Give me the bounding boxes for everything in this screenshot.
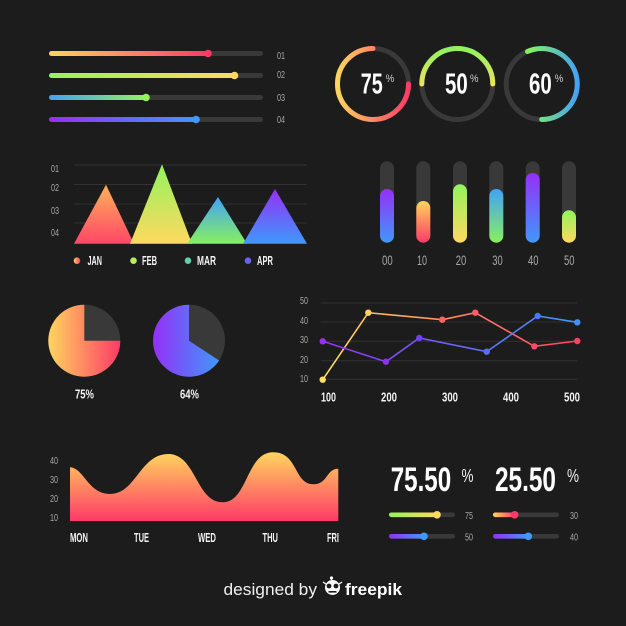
area chart y axis labels: 10: [50, 513, 58, 524]
bar 20: 20: [456, 252, 466, 268]
bar 30: [489, 161, 503, 268]
bar 10: [416, 161, 430, 268]
vertical bar chart: [380, 161, 576, 268]
pie chart 64 percent: [153, 305, 225, 402]
ring gauge 50 percent: 50: [445, 68, 468, 100]
slider 01: [49, 50, 285, 62]
triangle chart legend: JAN: [88, 254, 102, 268]
triangle chart y axis labels: 02: [51, 183, 59, 194]
line chart x axis labels: 400: [503, 390, 519, 404]
ring gauge 75 percent: 75: [361, 68, 383, 100]
triangle MAR: [187, 197, 247, 244]
purple to blue data line: [320, 313, 580, 365]
small slider 40: 40: [570, 532, 578, 544]
slider 03: 03: [277, 93, 285, 104]
ring gauge 60 percent: [506, 48, 577, 120]
slider 02: 02: [277, 70, 285, 81]
slider 04: 04: [277, 115, 285, 126]
area chart: [50, 452, 339, 545]
slider 03: [49, 93, 285, 104]
area chart y axis labels: 40: [50, 456, 58, 467]
area chart weekday labels: FRI: [327, 531, 339, 545]
area chart weekday labels: TUE: [134, 531, 149, 545]
area chart weekday labels: MON: [70, 531, 88, 545]
line chart x axis labels: 500: [564, 390, 580, 404]
ring gauges: [338, 48, 577, 120]
bar 10: 10: [417, 252, 427, 268]
line chart x axis labels: [321, 390, 580, 404]
line chart y axis labels: 30: [300, 335, 308, 346]
ring gauge 50 percent: %: [470, 73, 479, 85]
triangle chart y axis labels: 01: [51, 164, 59, 175]
footer credit: [224, 576, 403, 599]
line chart x axis labels: 200: [381, 390, 397, 404]
triangle chart legend: APR: [257, 254, 273, 268]
slider 04: [49, 115, 285, 126]
line chart y axis labels: [300, 296, 308, 385]
bar 40: 40: [528, 252, 539, 268]
triangle chart legend: [74, 254, 273, 268]
pie chart 75 percent: [48, 305, 120, 402]
area chart y axis labels: 20: [50, 494, 58, 505]
ring gauge 50 percent: [422, 48, 493, 120]
pie chart 64 percent: 64%: [180, 388, 199, 402]
triangle chart y axis labels: 04: [51, 228, 59, 239]
slider 01: 01: [277, 51, 285, 62]
triangle chart: [51, 164, 307, 268]
small slider 30: 30: [570, 511, 578, 522]
bar 00: 00: [382, 252, 393, 268]
yellow to red data line: [320, 310, 580, 383]
icon: freepik mascot: [323, 576, 342, 595]
area chart weekday labels: THU: [262, 531, 278, 545]
stat block 75.50 percent: %: [462, 466, 474, 486]
area chart weekday labels: WED: [198, 531, 216, 545]
triangle APR: [243, 189, 307, 244]
bar 00: [380, 161, 394, 268]
line chart x axis labels: 300: [442, 390, 458, 404]
bar 50: 50: [564, 252, 575, 268]
triangle chart y axis labels: [51, 164, 59, 239]
small slider 75: 75: [465, 511, 473, 522]
line chart y axis labels: 10: [300, 374, 308, 385]
bar 40: [526, 161, 540, 268]
ring gauge 60 percent: 60: [529, 68, 552, 100]
stat block 25.50 percent: 25.50: [495, 461, 556, 499]
designed by text: designed by: [224, 580, 318, 599]
pie chart 75 percent: 75%: [75, 388, 94, 402]
line chart: [300, 296, 580, 404]
freepik wordmark: freepik: [345, 580, 403, 599]
triangle chart legend: MAR: [197, 254, 216, 268]
line chart y axis labels: 20: [300, 355, 308, 366]
progress sliders 01-04: [49, 50, 285, 126]
bar 30: 30: [492, 252, 503, 268]
triangle FEB: [130, 164, 192, 244]
area chart weekday labels: [70, 531, 339, 545]
stat block 75.50 percent: [389, 461, 474, 544]
bar 20: [453, 161, 467, 268]
stat block 25.50 percent: %: [567, 466, 579, 486]
ring gauge 75 percent: [338, 48, 408, 120]
line chart y axis labels: 40: [300, 316, 308, 327]
ring gauge 75 percent: %: [386, 73, 394, 85]
area chart y axis labels: [50, 456, 58, 524]
slider 02: [49, 70, 285, 81]
area shape: [70, 452, 338, 521]
triangle JAN: [74, 185, 134, 244]
bar 50: [562, 161, 576, 268]
area chart y axis labels: 30: [50, 475, 58, 486]
triangle chart y axis labels: 03: [51, 206, 59, 217]
ring gauge 60 percent: %: [555, 73, 563, 85]
stat block 25.50 percent: [493, 461, 579, 544]
triangle chart legend: FEB: [142, 254, 157, 268]
stat block 75.50 percent: 75.50: [391, 461, 451, 499]
line chart y axis labels: 50: [300, 296, 308, 307]
line chart x axis labels: 100: [321, 390, 336, 404]
small slider 50: 50: [465, 532, 473, 544]
